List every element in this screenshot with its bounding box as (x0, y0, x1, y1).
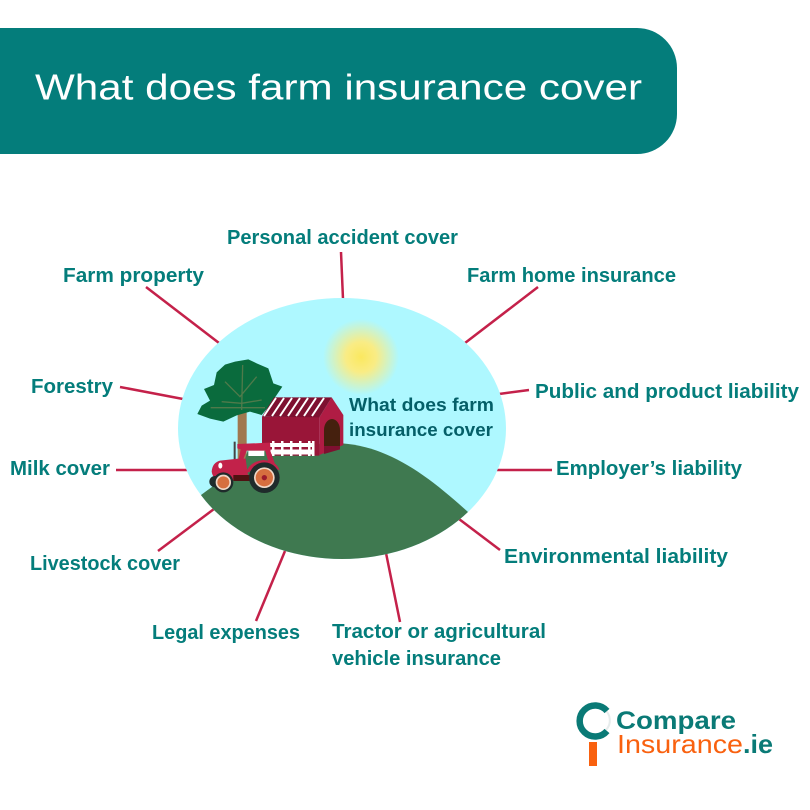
label: farm property: Farm property (63, 265, 205, 287)
label: forestry: Forestry (31, 376, 114, 398)
label: personal accident cover: Personal accident cover (227, 227, 458, 249)
label: environmental liability: Environmental liability (504, 546, 729, 568)
icon: fence (255, 441, 314, 456)
logo text: Compare (616, 707, 736, 735)
label: tractor or agricultural vehicle insurance (332, 621, 546, 670)
label: tractor or agricultural vehicle insurance: vehicle insurance (332, 648, 501, 670)
central farm scene (178, 298, 506, 570)
connector lines (116, 252, 552, 622)
hill (201, 444, 468, 559)
title banner (0, 28, 677, 154)
logo: Insurance (617, 729, 743, 759)
centre caption (349, 395, 494, 440)
label: legal expenses: Legal expenses (152, 622, 300, 644)
logo: .ie (743, 729, 773, 759)
label: public and product liability: Public and product liability (535, 381, 800, 403)
centre caption: insurance cover (349, 420, 493, 440)
title: What does farm insurance cover (35, 66, 642, 108)
icon: barn (262, 397, 343, 456)
sky ellipse (178, 298, 506, 559)
icon: tractor (209, 442, 280, 493)
label: employer's liability: Employer’s liability (556, 458, 743, 480)
centre caption: What does farm (349, 395, 494, 415)
label: milk cover: Milk cover (10, 458, 110, 480)
label: farm home insurance: Farm home insurance (467, 265, 676, 287)
logo (580, 706, 773, 766)
label: tractor or agricultural vehicle insurance: Tractor or agricultural (332, 621, 546, 643)
icon: tree (197, 359, 282, 460)
sun (323, 319, 399, 395)
label: livestock cover: Livestock cover (30, 553, 180, 575)
icon: magnifier (580, 706, 610, 766)
